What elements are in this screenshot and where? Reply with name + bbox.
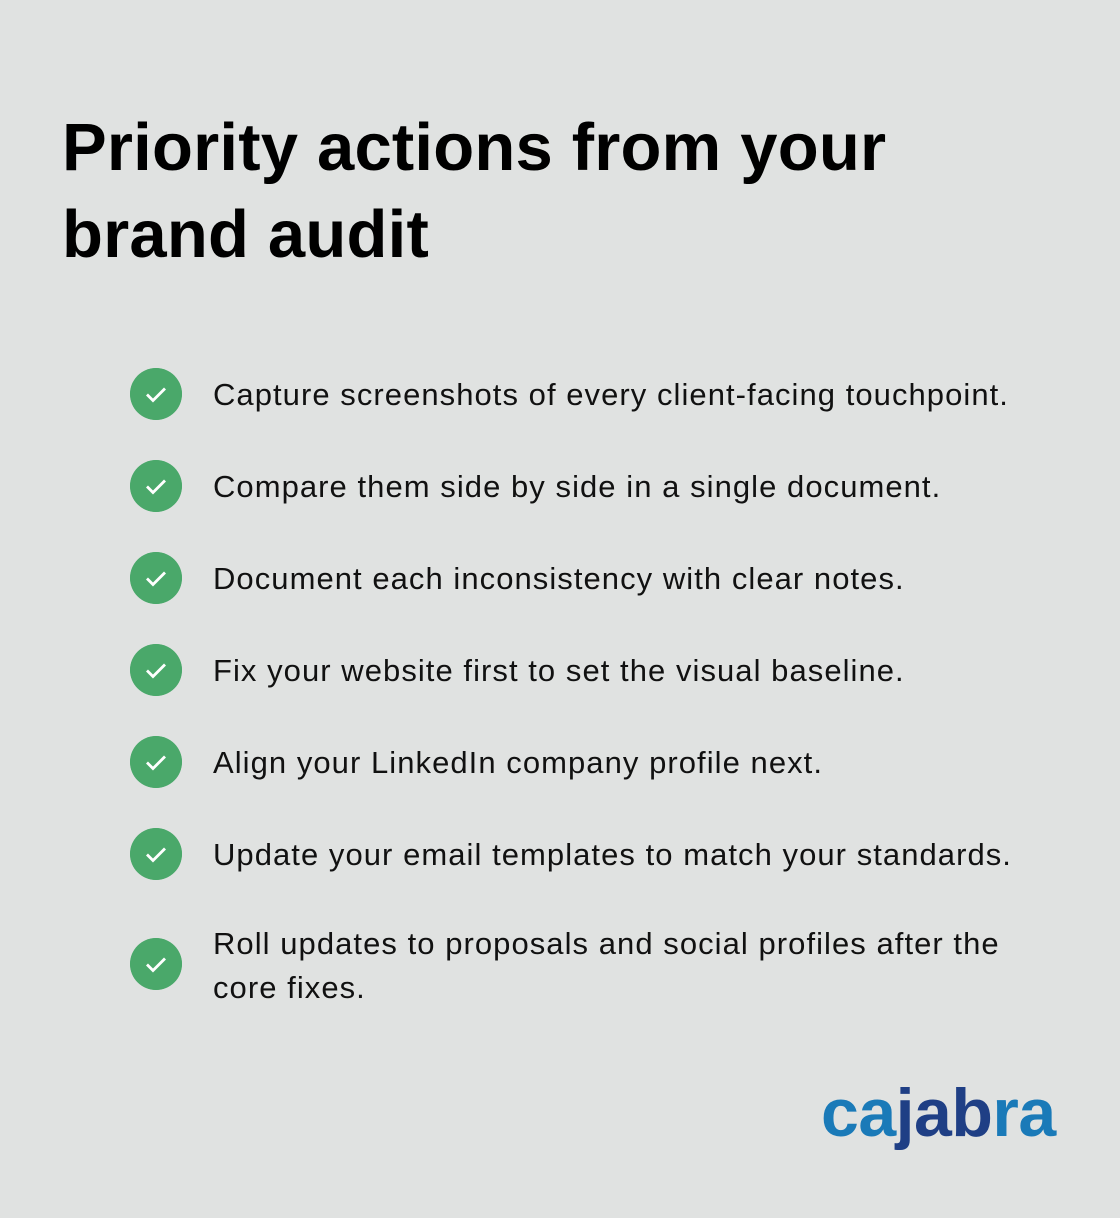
item 7 (130, 926, 1000, 1005)
item 6 (130, 828, 1012, 880)
title: Priority actions from your (62, 110, 886, 185)
item 6: Update your email templates to match your standards. (213, 837, 1012, 872)
item 5 (130, 736, 823, 788)
item 1 (130, 368, 1009, 420)
item 1: Capture screenshots of every client-facing touchpoint. (213, 377, 1009, 412)
item 4 (130, 644, 905, 696)
item 3 (130, 552, 905, 604)
item 7: Roll updates to proposals and social profiles after the (213, 926, 1000, 961)
item 2 (130, 460, 941, 512)
title (62, 110, 886, 272)
item 5: Align your LinkedIn company profile next. (213, 745, 823, 780)
item 7: core fixes. (213, 970, 366, 1005)
item 3: Document each inconsistency with clear notes. (213, 561, 905, 596)
title: brand audit (62, 197, 429, 272)
item 2: Compare them side by side in a single document. (213, 469, 941, 504)
logo: cajabra (821, 1075, 1056, 1151)
item 4: Fix your website first to set the visual baseline. (213, 653, 905, 688)
